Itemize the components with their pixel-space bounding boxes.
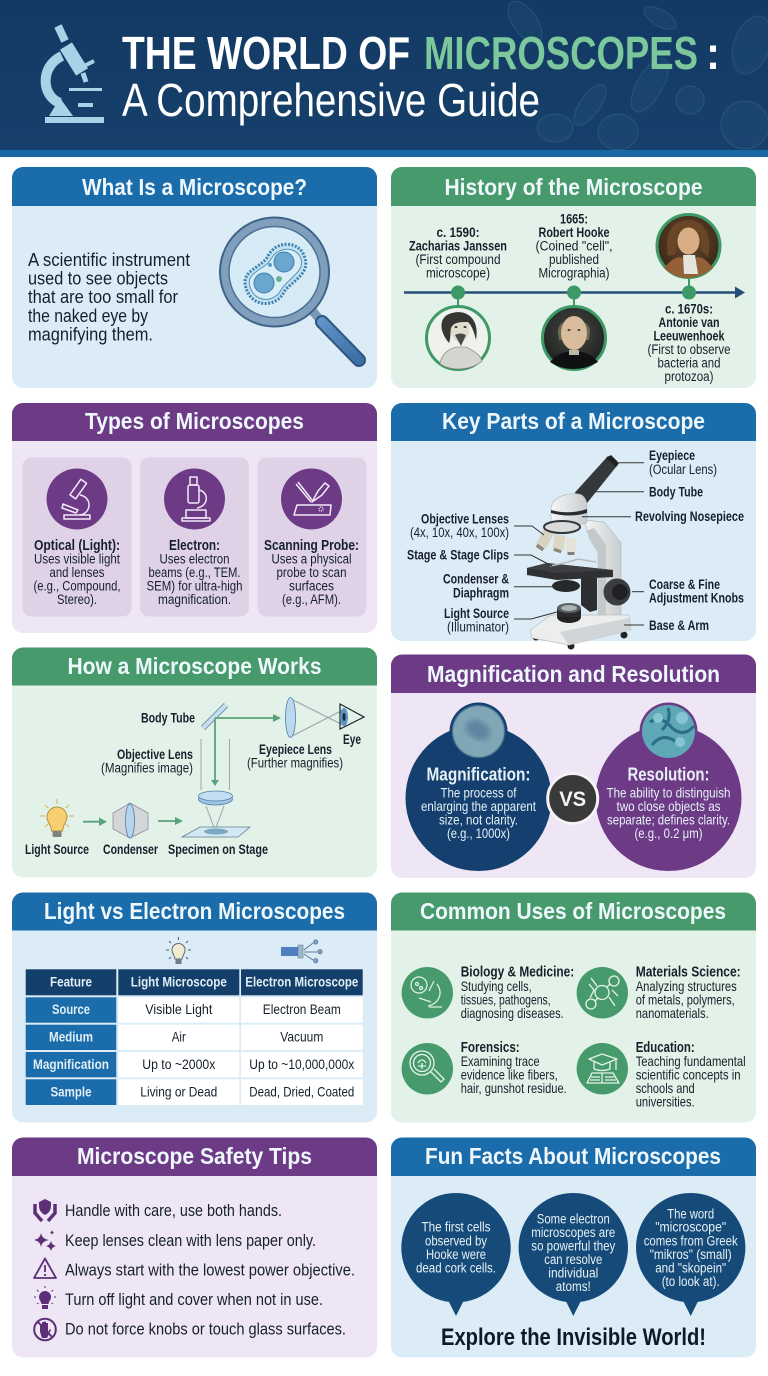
- event: Hooke: (Coined "cell",: [536, 238, 612, 254]
- icon: light bulb: [166, 937, 191, 964]
- comparison table: Up to ~2000x: [142, 1056, 215, 1072]
- panel: magnification and resolution: [391, 654, 756, 878]
- event: Janssen: microscope): [426, 266, 490, 280]
- speech bubble: atoms: microscopes are: [531, 1225, 615, 1240]
- part labels: Adjustment Knobs: [649, 590, 744, 606]
- heading: [12, 167, 377, 206]
- comparison table: Magnification: [33, 1056, 109, 1072]
- comparison table: Up to ~10,000,000x: [249, 1056, 354, 1072]
- comparison table: Dead, Dried, Coated: [249, 1084, 354, 1100]
- event: Hooke: Micrographia): [538, 266, 610, 280]
- speech bubble: word origin: [636, 1193, 745, 1316]
- event: Janssen: Zacharias Janssen: [409, 238, 507, 254]
- title: A Comprehensive Guide: [122, 74, 540, 126]
- title: [122, 27, 720, 126]
- icon: light bulb: [34, 1286, 56, 1309]
- card: optical: (e.g., Compound,: [34, 578, 120, 594]
- circle: resolution: separate; defines clarity.: [607, 812, 730, 828]
- tip: lowest power objective: Always start with the lowest power objective.: [65, 1260, 355, 1280]
- portrait: Leeuwenhoek: [657, 214, 720, 278]
- icon: forensic magnifier: [410, 1051, 444, 1082]
- circle: magnification: Magnification:: [426, 764, 530, 784]
- icon: electron beam: [281, 940, 322, 963]
- part labels: Light Source: [444, 606, 509, 621]
- heading: How a Microscope Works: [68, 653, 322, 679]
- card: scanning probe: (e.g., AFM).: [282, 592, 341, 607]
- part labels: Stage & Stage Clips: [407, 548, 509, 562]
- circle: magnification: enlarging the apparent: [421, 798, 536, 814]
- heading: What Is a Microscope?: [82, 174, 307, 200]
- tip: do not force knobs: Do not force knobs or touch glass surfaces.: [65, 1320, 346, 1338]
- leader lines: [514, 463, 644, 625]
- card: scanning probe: [258, 458, 366, 616]
- event: Janssen: c. 1590:: [436, 225, 480, 240]
- speech bubble: cork cells: [401, 1193, 511, 1316]
- event: Hooke: [536, 212, 612, 280]
- VS badge: VS: [559, 788, 586, 811]
- speech bubble: atoms: so powerful they: [531, 1238, 616, 1254]
- speech bubble: atoms: can resolve: [544, 1252, 602, 1267]
- diagram labels: (Further magnifies): [247, 756, 343, 770]
- diagram labels: [25, 710, 361, 857]
- speech bubble: word origin: and "skopein": [655, 1260, 726, 1276]
- title: THE WORLD OF: [122, 27, 410, 79]
- heading: Types of Microscopes: [85, 408, 304, 434]
- event: Hooke: 1665:: [560, 212, 588, 226]
- use: education: universities.: [636, 1094, 695, 1110]
- comparison table: Electron Beam: [263, 1001, 341, 1017]
- icon: molecule lattice: [586, 976, 619, 1009]
- diagram labels: (Magnifies image): [101, 760, 193, 776]
- heading: Key Parts of a Microscope: [442, 408, 705, 434]
- event: Hooke: Robert Hooke: [538, 225, 610, 240]
- event: Janssen: [409, 225, 507, 280]
- panel: types of microscopes: [12, 403, 377, 633]
- use: materials science: Analyzing structures: [636, 978, 737, 994]
- card: optical: [22, 458, 132, 616]
- comparison table: Sample: [50, 1084, 92, 1100]
- use: forensics: evidence like fibers,: [461, 1066, 558, 1082]
- heading: [12, 892, 377, 930]
- card: electron: Uses electron: [160, 552, 230, 566]
- card: optical: Stereo).: [57, 592, 97, 607]
- heading: [12, 403, 377, 441]
- card: electron: [140, 458, 249, 616]
- icon: warning triangle: [34, 1258, 56, 1278]
- definition text: A scientific instrument: [28, 250, 190, 270]
- definition text: the naked eye by: [28, 306, 148, 326]
- event: Janssen: (First compound: [416, 252, 500, 267]
- comparison table: Source: [52, 1001, 90, 1017]
- use: materials science: nanomaterials.: [636, 1005, 709, 1021]
- comparison table: Medium: [49, 1028, 93, 1044]
- use: forensics: hair, gunshot residue.: [461, 1080, 567, 1096]
- comparison table: Feature: [50, 974, 92, 990]
- icon: caring hands: [35, 1199, 55, 1221]
- use: education: scientific concepts in: [636, 1066, 741, 1082]
- speech bubble: word origin: (to look at).: [662, 1274, 720, 1289]
- card: scanning probe: Scanning Probe:: [264, 538, 359, 554]
- use: biology and medicine: Biology & Medicine:: [461, 964, 574, 980]
- icon: graduation cap and book: [587, 1054, 619, 1083]
- card: scanning probe: Uses a physical: [272, 552, 352, 566]
- icon: light bulb: [40, 799, 74, 837]
- event: Leeuwenhoek: Antonie van: [658, 315, 720, 330]
- circle: resolution: The ability to distinguish: [606, 784, 730, 800]
- heading: Microscope Safety Tips: [77, 1143, 312, 1169]
- part labels: Eyepiece: [649, 448, 695, 463]
- part labels: Body Tube: [649, 484, 703, 500]
- comparison table: Electron Microscope: [245, 974, 358, 990]
- use: forensics: Forensics:: [461, 1039, 520, 1056]
- heading: History of the Microscope: [444, 174, 702, 200]
- icon: electron microscope: [182, 477, 210, 521]
- faint microbes background: [501, 0, 768, 150]
- speech bubble: cork cells: dead cork cells.: [416, 1260, 496, 1276]
- circle: resolution: Resolution:: [628, 764, 710, 784]
- panel: light vs electron microscopes: [12, 892, 377, 1122]
- circle: magnification: (e.g., 1000x): [447, 825, 510, 841]
- comparison table: Air: [172, 1028, 186, 1044]
- VS badge: [548, 774, 598, 824]
- definition text: that are too small for: [28, 287, 178, 307]
- part labels: (Ocular Lens): [649, 462, 717, 477]
- comparison table: Visible Light: [145, 1001, 212, 1017]
- tip: keep lenses clean: Keep lenses clean with lens paper only.: [65, 1231, 316, 1250]
- speech bubble: cork cells: Hooke were: [426, 1247, 486, 1262]
- diagram labels: Eye: [343, 732, 361, 747]
- circle: magnification: The process of: [440, 784, 517, 800]
- part labels: Base & Arm: [649, 618, 709, 633]
- panel: history of the microscope: [391, 167, 756, 388]
- part labels: Revolving Nosepiece: [635, 509, 744, 524]
- part labels: Coarse & Fine: [649, 577, 720, 592]
- heading: Common Uses of Microscopes: [420, 898, 726, 924]
- heading: Magnification and Resolution: [427, 661, 720, 687]
- card: electron: Electron:: [169, 538, 220, 554]
- part labels: Condenser &: [443, 572, 509, 586]
- heading: [12, 648, 377, 686]
- part labels: (4x, 10x, 40x, 100x): [410, 525, 509, 540]
- heading: [391, 892, 756, 930]
- card: optical: Uses visible light: [34, 552, 120, 566]
- heading: [391, 403, 756, 441]
- card: scanning probe: probe to scan: [276, 565, 346, 580]
- use: education: [577, 1039, 746, 1110]
- card: electron: magnification.: [158, 592, 231, 607]
- definition text: used to see objects: [28, 268, 168, 288]
- speech bubble: cork cells: observed by: [425, 1234, 487, 1248]
- heading: [391, 167, 756, 206]
- speech bubble: word origin: The word: [667, 1206, 714, 1222]
- heading: Fun Facts About Microscopes: [425, 1143, 721, 1169]
- closing tagline: Explore the Invisible World!: [441, 1324, 706, 1351]
- definition text: magnifying them.: [28, 324, 153, 344]
- speech bubble: word origin: "mikros" (small): [650, 1247, 732, 1262]
- icon: optical microscope: [62, 479, 90, 519]
- title: MICROSCOPES: [424, 27, 698, 79]
- use: biology and medicine: tissues, pathogens,: [461, 992, 551, 1008]
- speech bubble: cork cells: The first cells: [422, 1220, 491, 1234]
- circle: resolution: (e.g., 0.2 μm): [634, 825, 702, 841]
- panel: key parts of a microscope: [391, 403, 756, 650]
- icon: scanning probe: [294, 482, 331, 515]
- diagram labels: Condenser: [103, 842, 159, 857]
- icon: magnifying glass with cell: [220, 218, 359, 360]
- heading: [391, 654, 756, 693]
- panel: microscope safety tips: [12, 1138, 377, 1358]
- use: forensics: Examining trace: [461, 1053, 540, 1069]
- panel: what is a microscope: [12, 167, 377, 388]
- part labels: Objective Lenses: [421, 512, 509, 526]
- portrait: Hooke: [542, 306, 606, 370]
- use: forensics: [402, 1039, 567, 1096]
- icon: do not touch: [34, 1319, 56, 1340]
- panel: how a microscope works: [12, 648, 377, 878]
- diagram labels: Objective Lens: [117, 747, 193, 762]
- event: Leeuwenhoek: (First to observe: [648, 342, 730, 357]
- use: materials science: of metals, polymers,: [636, 992, 735, 1008]
- part labels: [407, 448, 744, 634]
- event: Hooke: published: [549, 252, 599, 267]
- optical path diagram: [40, 698, 364, 838]
- event: Leeuwenhoek: protozoa): [664, 369, 714, 384]
- use: education: schools and: [636, 1080, 695, 1096]
- use: biology and medicine: [402, 964, 574, 1021]
- use: materials science: [577, 964, 741, 1021]
- header microscope icon: [45, 26, 104, 123]
- speech bubble: atoms: atoms!: [556, 1279, 591, 1294]
- use: education: Education:: [636, 1039, 695, 1056]
- heading: [12, 1138, 377, 1176]
- part labels: Diaphragm: [453, 586, 509, 600]
- diagram labels: Specimen on Stage: [168, 842, 268, 857]
- speech bubble: atoms: [519, 1193, 628, 1316]
- event: Leeuwenhoek: [648, 302, 730, 384]
- comparison table: Light Microscope: [131, 974, 227, 990]
- diagram labels: Eyepiece Lens: [259, 742, 332, 757]
- comparison table: [26, 969, 363, 1105]
- card: electron: SEM) for ultra-high: [146, 578, 242, 594]
- speech bubble: word origin: "microscope": [655, 1220, 726, 1234]
- speech bubble: atoms: individual: [548, 1266, 598, 1280]
- use: materials science: Materials Science:: [636, 964, 741, 980]
- circle: magnification: size, not clarity.: [439, 812, 518, 828]
- portrait: Janssen: [426, 306, 490, 370]
- heading: Light vs Electron Microscopes: [44, 898, 345, 924]
- use: biology and medicine: Studying cells,: [461, 978, 532, 994]
- tip: turn off light: Turn off light and cover when not in use.: [65, 1290, 323, 1309]
- use: biology and medicine: diagnosing diseases.: [461, 1005, 564, 1021]
- circle: resolution: [596, 702, 742, 871]
- event: Leeuwenhoek: c. 1670s:: [665, 302, 713, 316]
- page header banner: [0, 0, 768, 157]
- definition text: [28, 250, 190, 344]
- card: electron: beams (e.g., TEM.: [148, 565, 240, 580]
- panel: common uses of microscopes: [391, 892, 756, 1122]
- diagram labels: Body Tube: [141, 710, 195, 726]
- event: Leeuwenhoek: Leeuwenhoek: [654, 328, 725, 344]
- heading: [391, 1138, 756, 1176]
- comparison table: Vacuum: [280, 1028, 323, 1044]
- card: optical: and lenses: [50, 565, 105, 580]
- speech bubble: atoms: Some electron: [537, 1212, 610, 1226]
- microscope diagram: [514, 455, 644, 650]
- panel: fun facts about microscopes: [391, 1138, 756, 1358]
- icon: cell and microscope: [411, 977, 442, 1007]
- event: Leeuwenhoek: bacteria and: [658, 356, 720, 370]
- card: scanning probe: surfaces: [289, 578, 334, 594]
- card: optical: Optical (Light):: [34, 538, 120, 554]
- comparison table: Living or Dead: [140, 1084, 217, 1100]
- part labels: (Illuminator): [447, 620, 509, 634]
- speech bubble: word origin: comes from Greek: [644, 1234, 738, 1248]
- circle: magnification: [406, 702, 552, 871]
- title: :: [706, 27, 720, 79]
- timeline arrow: [404, 278, 745, 306]
- icon: sparkles: [34, 1230, 56, 1251]
- circle: resolution: two close objects as: [616, 798, 720, 814]
- tip: handle with care: Handle with care, use both hands.: [65, 1201, 282, 1220]
- diagram labels: Light Source: [25, 842, 89, 857]
